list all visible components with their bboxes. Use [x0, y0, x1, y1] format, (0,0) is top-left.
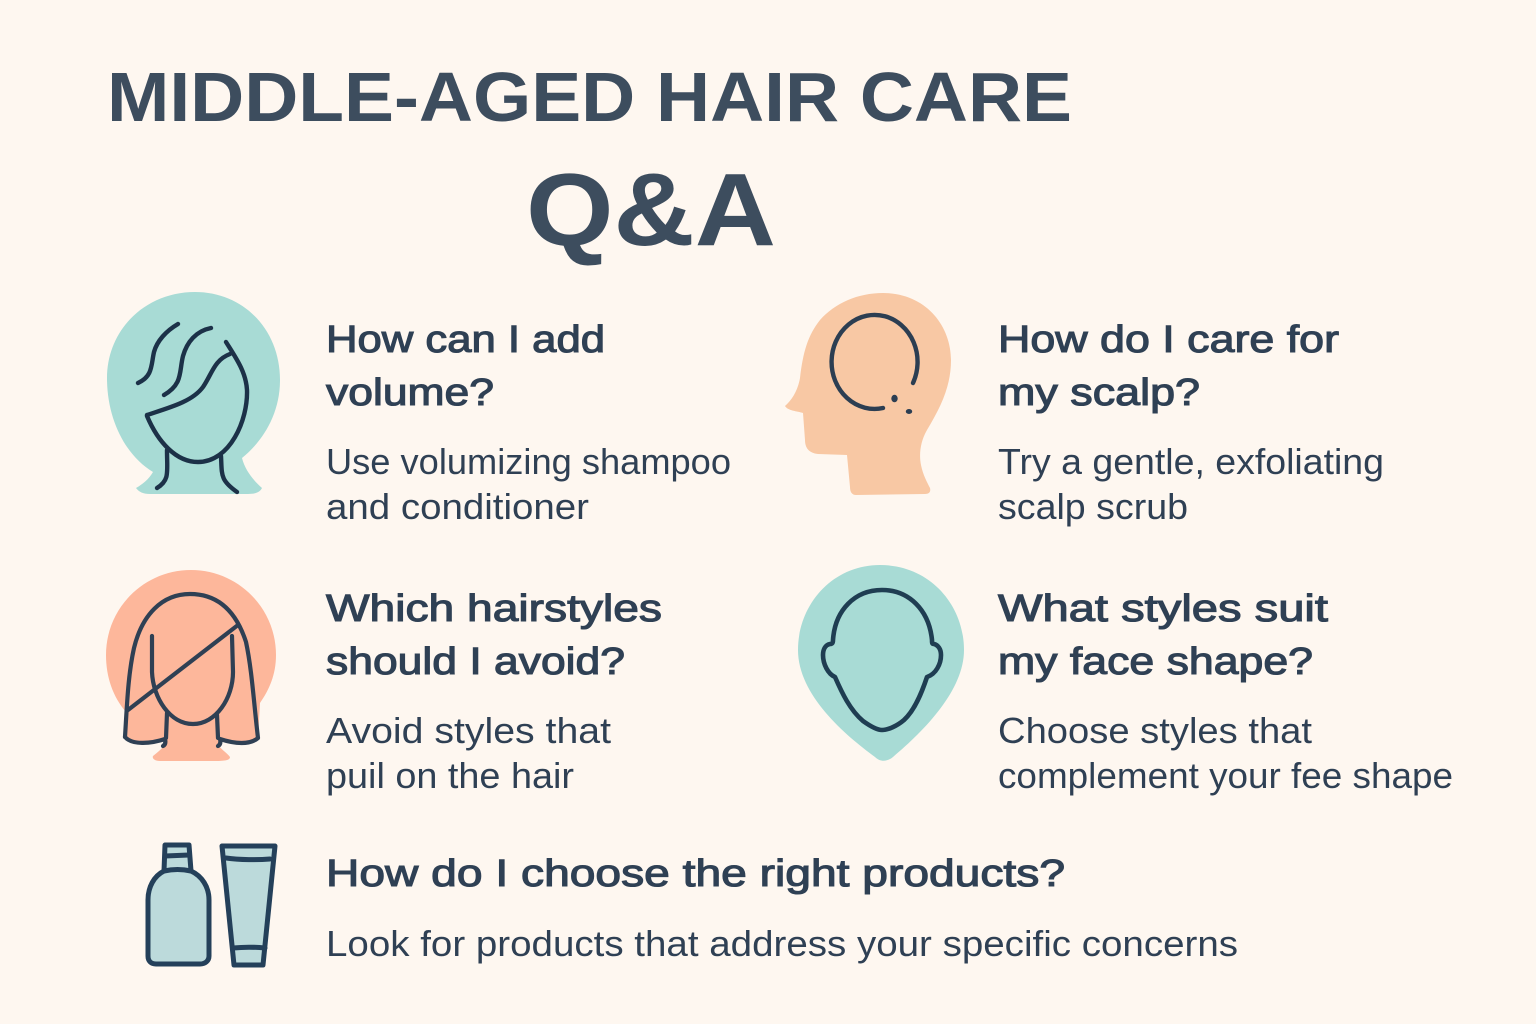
- title: MIDDLE-AGED HAIR CARE: [107, 58, 1072, 136]
- panel: scalp: scalp scrub: [998, 486, 1188, 527]
- answer: Avoid styles that: [326, 710, 611, 751]
- panel: scalp: [785, 293, 1384, 527]
- panel: face shape: complement your fee shape: [998, 755, 1453, 796]
- panel: hairstyles to avoid: should I avoid?: [326, 641, 625, 683]
- icon: wavy hair head: [107, 292, 280, 494]
- answer: Look for products that address your specific concerns: [326, 923, 1238, 964]
- answer: Choose styles that: [998, 710, 1312, 751]
- question: How do I care for: [998, 319, 1339, 361]
- subtitle: Q&A: Q&A: [526, 152, 776, 267]
- panel: scalp: my scalp?: [998, 372, 1200, 414]
- icon: bottle and tube: [147, 845, 275, 965]
- question: How do I choose the right products?: [326, 853, 1065, 895]
- icon: hairstyle crossed out: [106, 570, 276, 761]
- question: Which hairstyles: [326, 588, 662, 630]
- question: What styles suit: [998, 588, 1329, 630]
- panel: hairstyles to avoid: [106, 570, 662, 796]
- panel: volume: and conditioner: [326, 486, 589, 527]
- icon: head profile with scalp ring: [785, 293, 951, 495]
- icon: face outline on teardrop: [798, 565, 964, 761]
- panel: products: [147, 845, 1238, 965]
- question: How can I add: [326, 319, 605, 361]
- panel: hairstyles to avoid: puil on the hair: [326, 755, 574, 796]
- panel: face shape: [798, 565, 1453, 796]
- panel: volume: volume?: [326, 372, 494, 414]
- panel: volume: [107, 292, 731, 527]
- panel: face shape: my face shape?: [998, 641, 1313, 683]
- answer: Try a gentle, exfoliating: [998, 441, 1384, 482]
- answer: Use volumizing shampoo: [326, 441, 731, 482]
